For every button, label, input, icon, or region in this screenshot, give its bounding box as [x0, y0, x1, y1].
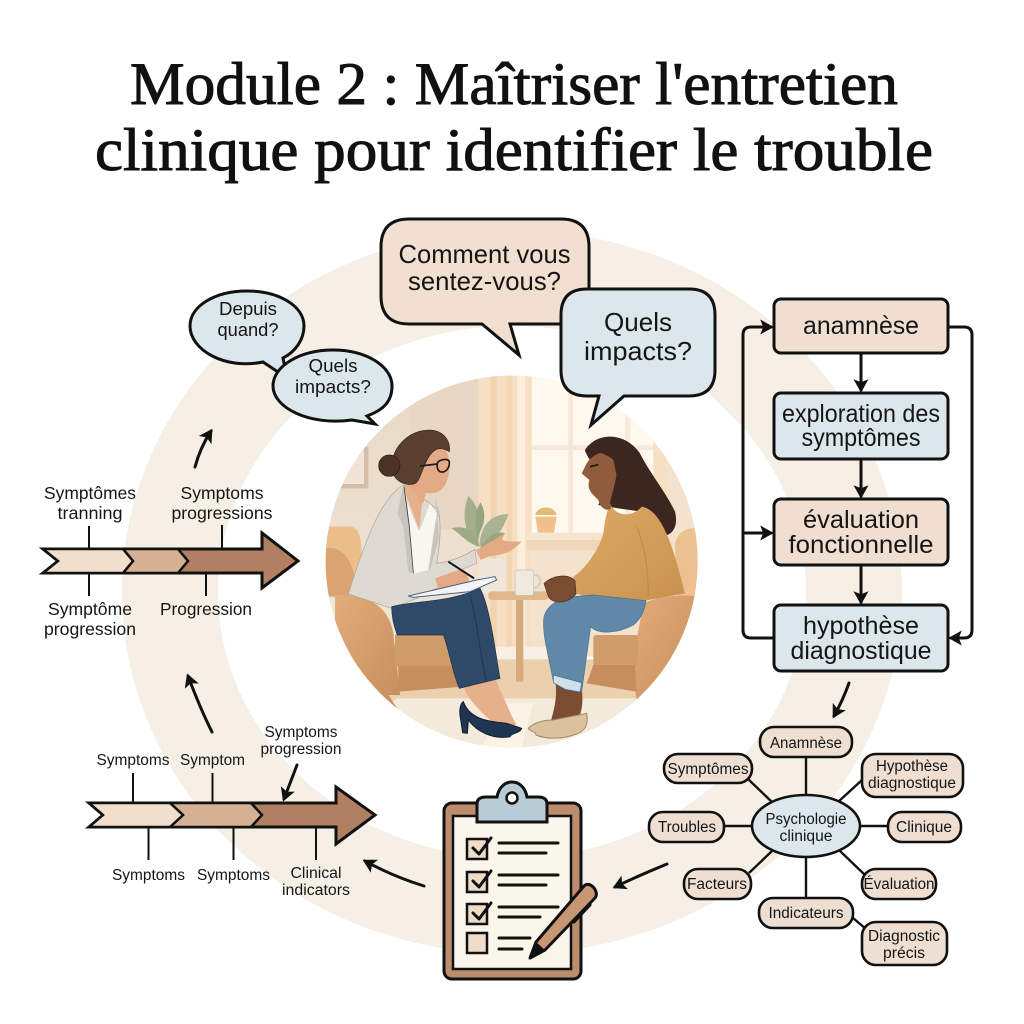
- labels: progression: [44, 619, 136, 639]
- labels: progression: [260, 741, 342, 758]
- labels: indicators: [282, 882, 350, 899]
- step: évaluation fonctionnelle: fonctionnelle: [788, 531, 934, 559]
- background ring: [170, 278, 854, 906]
- left side table and books: [328, 592, 358, 666]
- clinician hand and pen: [435, 571, 469, 588]
- speech bubble: Comment vous sentez-vous: [381, 219, 589, 355]
- labels: Symptoms: [197, 867, 270, 884]
- step: anamnèse: [774, 299, 948, 353]
- labels: Symptoms: [112, 867, 185, 884]
- right armchair: [587, 528, 702, 700]
- speech bubble: Quels impacts small: Quels: [308, 355, 358, 376]
- node: Anamnèse: [760, 727, 852, 757]
- arrow: flow to mind map: [834, 683, 849, 716]
- window pot: [535, 507, 557, 533]
- patient hands: [544, 576, 576, 602]
- speech bubble: Comment vous sentez-vous: Comment vous: [398, 239, 570, 269]
- labels: Symptôme: [48, 599, 132, 619]
- clinician trousers: [392, 588, 500, 688]
- central node: Psychologie: [766, 811, 846, 828]
- node: Clinique: Clinique: [896, 819, 952, 836]
- arrow: clipboard to lower timeline: [365, 861, 424, 886]
- labels: Symptômes: [44, 483, 136, 503]
- node: Clinique: [888, 812, 961, 842]
- step: hypothèse diagnostique: [774, 605, 948, 671]
- clinician jacket: [348, 485, 477, 608]
- clinician legs: [463, 678, 517, 727]
- node: Évaluation: [862, 869, 936, 899]
- node: Anamnèse: Anamnèse: [770, 735, 842, 752]
- node: Troubles: Troubles: [658, 819, 716, 836]
- labels: Symptoms: [264, 724, 338, 741]
- speech bubble: Depuis quand: quand?: [218, 319, 278, 340]
- chevron arrow: [43, 533, 298, 588]
- speech bubble: Quels impacts large: Quels: [604, 307, 672, 337]
- central node: clinique: [780, 828, 832, 845]
- plant and pot: [452, 496, 508, 594]
- icon: pen: [530, 884, 596, 958]
- patient hair back: [585, 437, 676, 535]
- step: hypothèse diagnostique: hypothèse: [803, 612, 919, 640]
- speech bubble: Comment vous sentez-vous: sentez-vous?: [408, 266, 561, 296]
- flow: clinical interview process: [743, 299, 972, 671]
- title: clinique pour identifier le trouble: [95, 117, 933, 183]
- speech bubble: Quels impacts large: impacts?: [584, 336, 692, 366]
- room background: [320, 370, 702, 753]
- patient jeans: [544, 595, 646, 692]
- clinician glasses: [420, 459, 449, 472]
- timeline: lower: [89, 724, 375, 899]
- labels: Symptom: [180, 752, 245, 769]
- node: Troubles: [649, 812, 724, 842]
- loop connectors: [743, 327, 972, 638]
- clinician: [348, 430, 522, 737]
- speech bubble: Quels impacts small: [273, 350, 392, 424]
- labels: tranning: [58, 503, 122, 523]
- title: [95, 51, 933, 183]
- table and mug: [488, 570, 548, 682]
- clinician head: [411, 449, 450, 504]
- speech bubble: Quels impacts small: impacts?: [295, 376, 371, 397]
- node: Symptômes: [664, 754, 752, 783]
- speech bubble: Depuis quand: Depuis: [219, 298, 277, 319]
- labels: progressions: [172, 503, 273, 523]
- central node: [752, 795, 860, 857]
- checklist: [467, 838, 558, 953]
- step: hypothèse diagnostique: diagnostique: [790, 637, 932, 665]
- clinician blouse: [407, 503, 437, 574]
- labels: Clinical: [290, 865, 342, 882]
- node: Facteurs: Facteurs: [687, 876, 747, 893]
- node: Symptômes: Symptômes: [668, 761, 749, 778]
- labels: Progression: [160, 599, 252, 619]
- mind map: psychologie clinique: [649, 727, 963, 965]
- speech bubble: Quels impacts large: [561, 289, 715, 425]
- node: Hypothèse diagnostique: diagnostique: [868, 775, 956, 792]
- step: anamnèse: anamnèse: [803, 312, 919, 340]
- labels: Symptoms: [96, 752, 170, 769]
- labels: Symptoms: [180, 483, 264, 503]
- icon: clipboard: [444, 782, 596, 979]
- clipboard on lap: [408, 577, 497, 597]
- speech bubble: Depuis quand: [190, 291, 304, 372]
- clinician shoes: [460, 702, 522, 737]
- left armchair: [325, 527, 463, 710]
- node: Diagnostic précis: [862, 922, 947, 965]
- node: Hypothèse diagnostique: [862, 754, 963, 797]
- arrow: up to speech bubbles: [195, 431, 211, 467]
- node: Évaluation: Évaluation: [864, 876, 934, 893]
- step: évaluation fonctionnelle: évaluation: [803, 506, 919, 534]
- step: exploration des symptômes: symptômes: [802, 424, 920, 452]
- patient face: [582, 452, 617, 510]
- arrow: mind map to clipboard: [615, 864, 667, 887]
- node: Indicateurs: [759, 898, 853, 928]
- illustration: clinical interview: [320, 370, 702, 753]
- node: Hypothèse diagnostique: Hypothèse: [876, 758, 948, 775]
- step: exploration des symptômes: [774, 393, 948, 459]
- chevron arrow: [89, 787, 375, 844]
- step: exploration des symptômes: exploration des: [782, 400, 940, 428]
- node: Diagnostic précis: précis: [883, 945, 925, 962]
- patient: [528, 437, 685, 738]
- node: Diagnostic précis: Diagnostic: [868, 928, 940, 945]
- timeline: upper: [43, 483, 298, 639]
- node: Facteurs: [684, 869, 751, 899]
- labels: [96, 724, 350, 899]
- patient shoes: [528, 713, 587, 738]
- patient sweater: [573, 503, 685, 601]
- arrow: progression pointer: [284, 765, 297, 799]
- patient shins: [551, 684, 582, 720]
- arrow: lower timeline to upper timeline: [188, 676, 212, 732]
- title: Module 2 : Maîtriser l'entretien: [130, 51, 898, 117]
- step: évaluation fonctionnelle: [774, 499, 948, 565]
- node: Indicateurs: Indicateurs: [768, 905, 844, 922]
- labels: [44, 483, 273, 639]
